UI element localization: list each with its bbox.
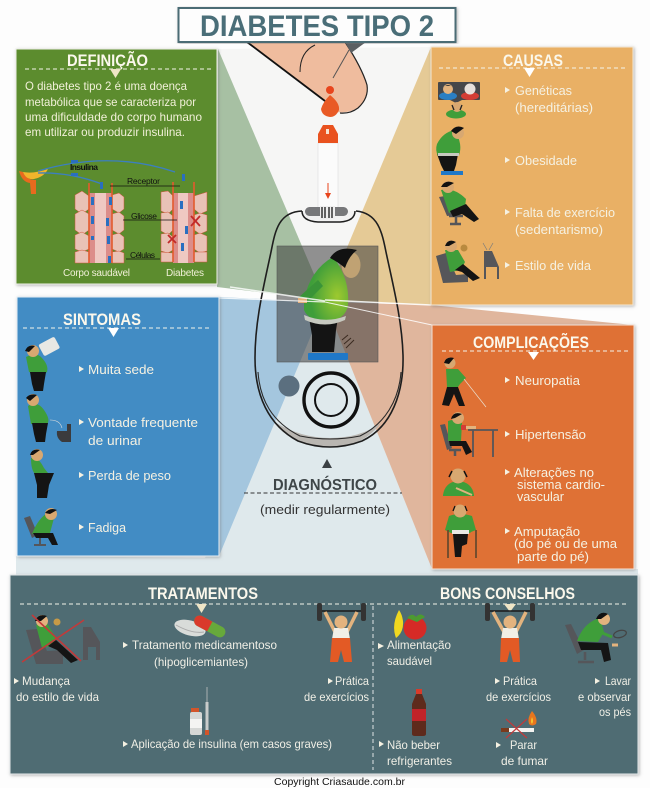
definition text: em utilizar ou produzir insulina. (25, 125, 185, 139)
icon: weightlifter (317, 603, 366, 662)
icon: blind man with cane (442, 358, 486, 407)
panel: causas (431, 47, 633, 305)
text: alimentação saudável: Alimentação (387, 638, 451, 652)
text: alterações cardiovasculares: Alterações no (514, 465, 594, 480)
icon: soda bottle (412, 689, 426, 736)
icon: amputee with crutches (445, 504, 476, 558)
text: não beber refrigerantes: refrigerantes (387, 754, 452, 768)
icon: weightlifter (485, 603, 535, 662)
icon: sedentary man in chair (439, 181, 479, 224)
text: muita sede: Muita sede (88, 362, 154, 377)
text: estilo de vida: Estilo de vida (515, 258, 592, 273)
diagram labels: Corpo saudável (63, 268, 130, 279)
meter buttons (278, 373, 358, 427)
text: prática de exercícios: Prática (335, 674, 369, 688)
text: alterações cardiovasculares (505, 465, 605, 504)
text: prática de exercícios: Prática (503, 674, 537, 688)
definition text: uma dificuldade do corpo humano (25, 110, 202, 124)
heading: bons conselhos: BONS CONSELHOS (440, 584, 575, 603)
icon: obese man on scale (436, 127, 464, 175)
text: mudança: Mudança (22, 674, 70, 688)
text: fadiga: Fadiga (88, 520, 127, 535)
icon: thin man with loose trousers (30, 449, 54, 498)
diagram: insulin and cells (19, 160, 207, 279)
panel: complicações (432, 325, 634, 569)
light beams behind the panels (16, 47, 638, 576)
text: lavar e observar os pés: e observar (578, 690, 631, 704)
copyright: Copyright Criasaude.com.br (274, 776, 405, 788)
text: falta de exercício: Falta de exercício (515, 205, 615, 220)
icon: tablet and capsule (173, 614, 227, 639)
text: vontade frequente: de urinar (88, 433, 143, 448)
obese man on scale (298, 249, 360, 360)
diagram labels: Glicose (131, 211, 157, 221)
text: amputação (505, 524, 618, 564)
lancet (333, 42, 366, 78)
icon: man holding chest (443, 468, 474, 496)
definition text: O diabetes tipo 2 é uma doença (25, 79, 187, 93)
text: obesidade: Obesidade (515, 153, 577, 168)
text: falta de exercício: (sedentarismo) (515, 222, 603, 237)
text: perda de peso: Perda de peso (88, 468, 171, 483)
text: não beber refrigerantes (379, 738, 452, 768)
white rays through the meter (219, 287, 432, 325)
text: alimentação saudável (378, 638, 451, 668)
text: genéticas: Genéticas (515, 83, 572, 98)
panel: tratamentos and bons conselhos (10, 575, 638, 774)
blood drop (321, 86, 339, 117)
text: vontade frequente (79, 415, 198, 448)
text: não beber refrigerantes: Não beber (387, 738, 440, 752)
icon: man inspecting his feet (565, 613, 627, 662)
panel: definição (16, 49, 217, 284)
icon: man drinking (25, 336, 60, 391)
diagram labels: Células (130, 250, 155, 260)
text: amputação: (do pé ou de uma (514, 536, 618, 551)
text: hipertensão: Hipertensão (515, 427, 586, 442)
text: alimentação saudável: saudável (387, 654, 432, 668)
heading: definição: DEFINIÇÃO (67, 50, 148, 70)
text: falta de exercício (505, 205, 615, 237)
text: parar de fumar: Parar (510, 738, 537, 752)
healthy vessel (75, 183, 124, 263)
text: mudança: do estilo de vida (16, 690, 99, 704)
diabetes vessel (161, 182, 207, 263)
text: amputação: parte do pé) (517, 549, 589, 564)
text: aplicação de insulina: Aplicação de insulina (em casos graves) (131, 737, 332, 751)
glucose meter body (255, 206, 403, 447)
text: parar de fumar (496, 738, 548, 768)
icon: vial and syringe (190, 687, 209, 735)
heading: complicações: COMPLICAÇÕES (473, 332, 589, 352)
diagram labels: Insulina (70, 162, 98, 172)
text: lavar e observar os pés: os pés (599, 705, 631, 719)
definition text: metabólica que se caracteriza por (25, 95, 196, 109)
text: genéticas (505, 83, 593, 115)
diagram labels: Receptor (127, 176, 160, 186)
icon: man eating at tv (436, 240, 499, 283)
text: prática de exercícios: de exercícios (486, 690, 551, 704)
pancreas (19, 169, 48, 194)
icon: banana and tomato (394, 610, 426, 640)
text: neuropatia: Neuropatia (515, 373, 581, 388)
icon: man urinating (26, 394, 71, 442)
text: amputação: Amputação (514, 524, 580, 539)
panel: sintomas (17, 297, 219, 556)
icon: crossed-out cigarette (501, 711, 536, 738)
text: tratamento medicamentoso: (hipoglicemiantes) (154, 655, 248, 669)
text: prática de exercícios: de exercícios (304, 690, 369, 704)
text: alterações cardiovasculares: sistema cardio- (517, 477, 605, 492)
meter screen (277, 246, 378, 362)
diagnóstico: DIAGNÓSTICO (273, 475, 377, 494)
text: tratamento medicamentoso: Tratamento medicamentoso (132, 638, 277, 652)
diagram labels (63, 162, 204, 279)
icon: crossed-out man eating before tv (22, 615, 100, 664)
strip connector (305, 206, 348, 219)
finger with blood drop (247, 42, 367, 117)
text: parar de fumar: de fumar (501, 754, 548, 768)
text: mudança (14, 674, 99, 704)
icon: man at desk with blood pressure cuff (440, 412, 498, 457)
text: vontade frequente: Vontade frequente (88, 415, 198, 430)
definition text (25, 79, 202, 139)
heading: tratamentos: TRATAMENTOS (148, 584, 258, 603)
diagnóstico: (medir regularmente) (260, 502, 390, 517)
diagnóstico (244, 459, 402, 517)
title: DIABETES TIPO 2 (200, 10, 434, 43)
text: alterações cardiovasculares: vascular (517, 489, 565, 504)
heading: causas: CAUSAS (503, 51, 563, 70)
heading: sintomas: SINTOMAS (63, 310, 141, 329)
text: prática de exercícios (304, 674, 369, 704)
test strip (318, 125, 338, 209)
text: prática de exercícios (486, 674, 551, 704)
icon: tired man in chair (24, 508, 58, 545)
diagram labels: Diabetes (166, 268, 204, 279)
icon: genetics parents and child (438, 82, 480, 118)
text: tratamento medicamentoso (123, 638, 277, 669)
text: lavar e observar os pés: Lavar (605, 674, 631, 688)
text: genéticas: (hereditárias) (515, 100, 593, 115)
text: lavar e observar os pés (578, 674, 631, 719)
